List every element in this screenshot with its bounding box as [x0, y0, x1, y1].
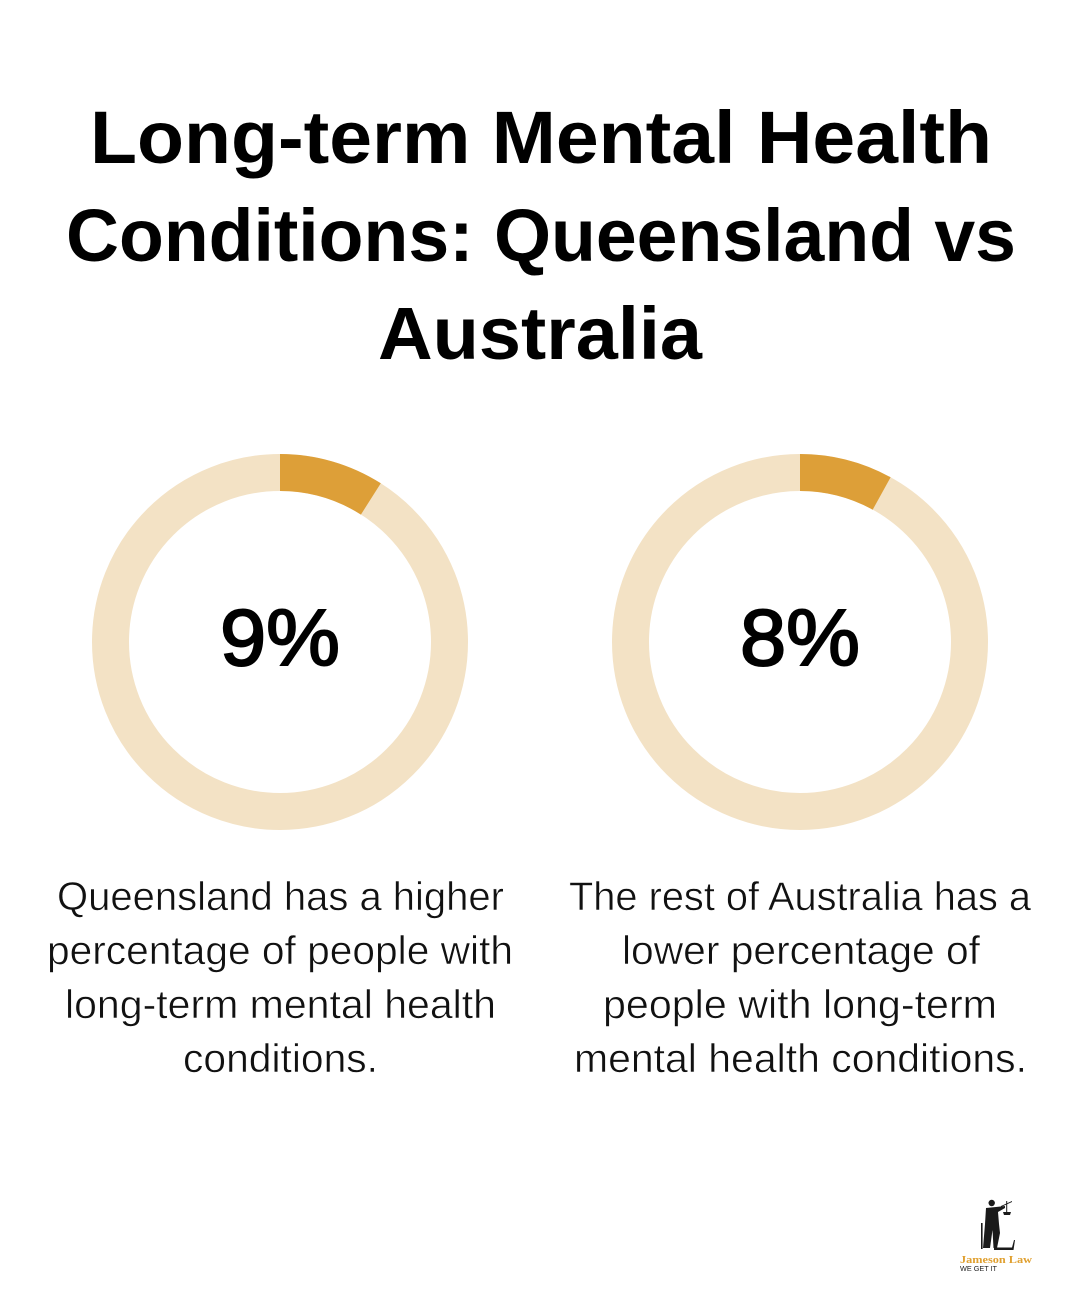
text: Australia description: The rest of Australia has a	[569, 875, 1032, 919]
logo tagline: WE GET IT	[960, 1266, 998, 1273]
text: Queensland description: long-term mental health	[65, 983, 496, 1027]
donut chart: Queensland 9%	[110, 454, 450, 812]
stat: 8%: 8%	[740, 593, 860, 682]
title: Long-term Mental Health	[90, 96, 992, 179]
panel: Australia	[569, 454, 1032, 1081]
logo wordmark: Jameson Law	[960, 1254, 1032, 1266]
logo: Jameson Law	[960, 1200, 1032, 1273]
title	[66, 96, 1016, 375]
title: Australia	[378, 292, 703, 375]
donut chart: Australia 8%	[630, 454, 970, 812]
text: Australia description: lower percentage of	[622, 929, 981, 973]
text: Queensland description: conditions.	[183, 1037, 378, 1081]
stat: 9%: 9%	[220, 593, 340, 682]
title: Conditions: Queensland vs	[66, 194, 1016, 277]
icon: lady justice	[981, 1200, 1015, 1250]
text: Queensland description: percentage of people with	[47, 929, 513, 973]
text: Australia description: people with long-term	[603, 983, 997, 1027]
text: Queensland description	[47, 875, 513, 1081]
text: Queensland description: Queensland has a higher	[57, 875, 504, 919]
text: Australia description	[569, 875, 1032, 1081]
panel: Queensland	[47, 454, 513, 1081]
text: Australia description: mental health conditions.	[574, 1037, 1027, 1081]
